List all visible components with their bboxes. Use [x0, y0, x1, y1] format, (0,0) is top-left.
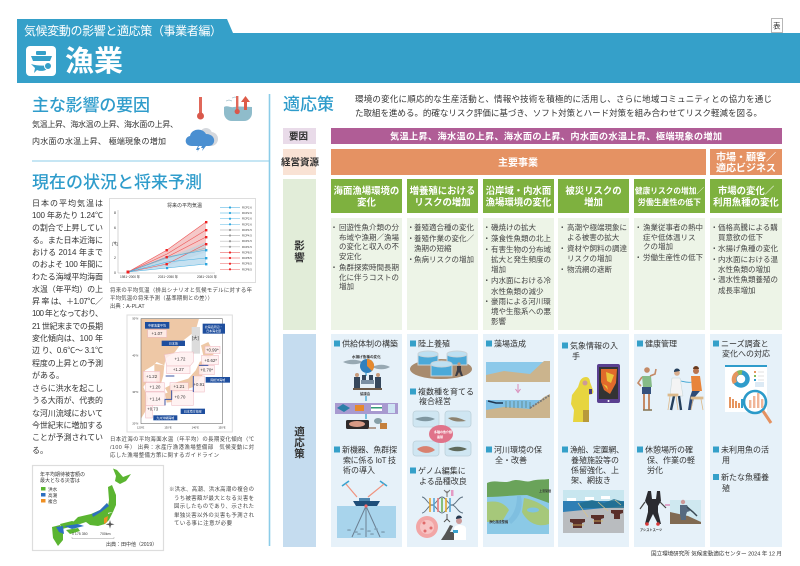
impacts panel 5: 漁業従事者の熱中 — [643, 222, 703, 232]
factors text — [32, 119, 178, 146]
impacts panel 4: よる被害の拡大 — [567, 232, 620, 242]
impacts panel 3: 豪雨による河川環 — [491, 296, 551, 306]
impacts panel 5 — [634, 218, 705, 330]
chart caption: 出典：A-PLAT — [110, 302, 145, 310]
illustration: ship sonar and satellites — [337, 481, 396, 538]
column 3 header: 漁場環境の変化 — [486, 196, 552, 208]
illustration: assist suit: アシストスーツ — [640, 527, 662, 532]
impacts panel 2 — [407, 218, 478, 330]
row label: adaptation measures — [283, 334, 316, 547]
adaptation panel 6: 用 — [722, 456, 730, 465]
body paragraph: のおよそ 100 年間に — [32, 259, 103, 269]
body paragraph: わたる海域平均海面 — [32, 272, 103, 282]
map: sea surface temperature trend around Japan: 中部漁業平均 — [148, 323, 166, 328]
adaptation panel 6 — [710, 334, 782, 547]
footer credit: 国立環境研究所 気候変動適応センター 2024 年 12 月 — [651, 550, 782, 558]
column 3 header: 沿岸域・内水面 — [486, 185, 551, 196]
impacts panel 5: 症や低体温リス — [643, 232, 696, 242]
map legend: 複合 — [48, 498, 58, 505]
map: sea surface temperature trend around Japan: 九州沖縄海域 — [156, 415, 174, 420]
row label: adaptation measures: 策 — [294, 447, 305, 460]
chart legend: RCP4.5 — [242, 239, 252, 243]
column 1 header: 変化 — [357, 196, 376, 208]
impacts panel 2: ・ — [407, 223, 414, 232]
map: sea surface temperature trend around Japan: +0.99* — [206, 348, 219, 353]
map: sea surface temperature trend around Japan: +1.27 — [173, 367, 184, 372]
impacts panel 1: ・ — [330, 223, 338, 232]
illustration: multi-species tanks: 養殖 — [437, 434, 443, 439]
adaptation panel 5 — [634, 334, 705, 547]
adaptation panel 3: 藻場造成 — [494, 338, 526, 348]
impacts panel 2: ・ — [407, 255, 414, 264]
map: sea surface temperature trend around Japan — [127, 315, 232, 432]
adaptation panel 5: 休憩場所の確 — [645, 444, 693, 454]
chart caption: 平均気温の将来予測（基準期間との差）） — [110, 294, 213, 302]
impacts panel 4: 物流網の遮断 — [567, 264, 612, 274]
adaptation panel 5: 健康管理 — [645, 338, 677, 348]
chart legend: RCP2.6 — [242, 206, 252, 210]
illustration: assist suit — [640, 491, 701, 532]
map: sea surface temperature trend around Japan: 50°N — [132, 317, 138, 321]
map: sea surface temperature trend around Japan: +1.72 — [175, 356, 186, 361]
section heading: adaptation: 適応策 — [283, 95, 334, 114]
map note — [169, 485, 255, 527]
impacts panel 3: ・ — [483, 276, 490, 285]
map: sea surface temperature trend around Japan: 北海道周辺・ — [205, 324, 223, 329]
impacts panel 6 — [710, 218, 782, 330]
map: sea surface temperature trend around Japan: 日本海北部 — [206, 328, 221, 333]
map note: ※洪水、高潮、洪水高潮の複合の — [169, 485, 254, 493]
line chart: future mean temperature: 将来の平均気温 — [167, 202, 202, 209]
column 3 header — [483, 179, 554, 213]
map note: ている事に注意が必要 — [174, 519, 233, 527]
map: largest annual disaster damage — [32, 466, 164, 550]
impacts panel 6: ・ — [710, 275, 718, 284]
row: management resources — [281, 149, 782, 175]
chart legend: RCP2.6 — [242, 211, 252, 215]
body paragraph: さらに洪水を起こし — [32, 383, 103, 393]
impacts panel 6: 買意欲の低下 — [718, 232, 763, 242]
row: management resources: 経営資源 — [281, 156, 319, 168]
adaptation panel 5: 保、作業の軽 — [647, 455, 695, 465]
adaptation panel 2: 複合経営 — [419, 396, 451, 406]
row label: impacts: 響 — [294, 251, 305, 264]
header banner — [17, 19, 800, 83]
body paragraph: 昇 率 は、＋1.07℃／ — [32, 297, 103, 306]
map caption: 応した漁場整備方策に関するガイドライン — [110, 451, 219, 459]
map: sea surface temperature trend around Japan: +1.22 — [146, 374, 158, 379]
row label: adaptation measures: 適 — [294, 425, 305, 438]
impacts panel 6: ・ — [710, 255, 718, 264]
row label: impacts — [283, 179, 316, 330]
map: sea surface temperature trend around Japan: [大] — [192, 334, 199, 341]
chart legend: RCP8.5 — [242, 267, 252, 271]
chart caption — [110, 286, 253, 310]
body paragraph: 日本の平均気温は — [32, 198, 103, 208]
impacts panel 3: 影響 — [491, 316, 506, 326]
adaptation panel 1: 新機器、魚群探 — [342, 444, 397, 454]
page tag: 表 — [773, 20, 781, 30]
impacts panel 1: 回遊性魚介類の分 — [339, 222, 399, 232]
impacts panel 1: 布域や漁期／漁場 — [339, 232, 399, 242]
body paragraph: な河川流域において — [32, 408, 103, 418]
map legend — [41, 486, 58, 505]
illustration: supply system — [335, 354, 398, 429]
impacts panel 3: ・ — [483, 297, 490, 306]
illustration: river environment — [487, 479, 551, 534]
map note: うち被害額が最大となる災害を — [174, 494, 254, 502]
line chart: future mean temperature: 2 — [114, 256, 116, 260]
adaptation panel 4: 係留強化、上 — [571, 465, 619, 475]
icon: storm cloud — [186, 128, 218, 152]
line chart: future mean temperature: 8 — [114, 211, 116, 215]
body paragraph: 100 年あたり 1.24℃ — [32, 210, 103, 220]
map legend: 高潮 — [48, 492, 58, 499]
line chart: future mean temperature: 2031~2050 年 — [158, 274, 179, 279]
adaptation panel 2: ゲノム編集に — [418, 466, 466, 476]
map: sea surface temperature trend around Japan: +0.91 — [194, 382, 205, 387]
chart legend: RCP4.5 — [242, 245, 252, 249]
impacts panel 3: 水性魚類の減少 — [491, 286, 544, 296]
column 4 header: 増加 — [584, 196, 603, 208]
impacts panel 1: 魚群探索時間長期 — [339, 262, 399, 272]
body paragraph: 程度の上昇との予測 — [32, 358, 103, 368]
map: sea surface temperature trend around Japan: +0.70 — [175, 394, 186, 399]
adaptation panel 6: 未利用魚の活 — [721, 444, 769, 454]
adaptation panel 2: よる品種改良 — [419, 476, 467, 486]
adaptation intro: た取組を進める。的確なリスク評価に基づき、ソフト対策とハード対策を組み合わせてリスク軽減を図る。 — [355, 108, 762, 118]
impacts panel 5: ・ — [634, 223, 642, 232]
adaptation panel 4: 漁船、定置網、 — [570, 444, 624, 454]
body paragraph: 100 年となっており、 — [32, 308, 103, 318]
chart legend: RCP2.6 — [242, 222, 252, 226]
map: sea surface temperature trend around Japan: +1.07 — [152, 331, 163, 336]
adaptation panel 1: 供給体制の構築 — [342, 338, 398, 348]
adaptation intro: 環境の変化に順応的な生産活動と、情報や技術を積極的に活用し、さらに地域コミュニティとの協力を通じ — [355, 94, 772, 104]
line chart: future mean temperature: 4 — [114, 241, 116, 245]
illustration: genome editing — [416, 490, 466, 540]
column 1 header — [331, 179, 402, 213]
impacts panel 2: 養殖作業の変化／ — [414, 233, 474, 243]
illustration: seaweed bed creation — [486, 361, 550, 418]
section heading: main factors: 主な影響の要因 — [32, 96, 150, 115]
map: largest annual disaster damage: 0 175 350 — [72, 532, 88, 536]
line chart: future mean temperature — [110, 198, 256, 282]
adaptation panel 2: 複数種を育てる — [418, 386, 474, 396]
impacts panel 6: 価格高騰による購 — [718, 222, 778, 232]
column 6 header — [710, 179, 782, 213]
impacts panel 3: 増加 — [491, 264, 506, 274]
column 6 header: 利用魚種の変化 — [713, 196, 779, 208]
body paragraph: うる大雨が、代表的 — [32, 395, 103, 405]
chart legend: RCP4.5 — [242, 234, 252, 238]
adaptation intro — [355, 94, 772, 118]
column 2 header — [407, 179, 478, 213]
impacts panel 4: ・ — [558, 265, 566, 274]
column 4 header — [558, 179, 629, 213]
impacts panel 3: 有害生物の分布域 — [491, 244, 551, 254]
impacts panel 6: 水性魚類の増加 — [718, 264, 770, 274]
map: largest annual disaster damage: 出典：田中他（2019） — [106, 541, 157, 548]
line chart: future mean temperature: 2081~2100 年 — [197, 274, 218, 279]
row: management resources: 市場・顧客／ — [716, 150, 776, 164]
column 5 header: 健康リスクの増加／ — [635, 186, 704, 196]
impacts panel 1: 安定化 — [339, 252, 362, 261]
column 2 header: リスクの増加 — [414, 196, 471, 208]
impacts panel 2: ・ — [407, 234, 414, 243]
illustration: multi-species tanks: 多種の魚介類 — [434, 429, 452, 434]
map: sea surface temperature trend around Japan: 150°E — [218, 426, 226, 430]
impacts panel 1: ・ — [330, 263, 338, 272]
map: sea surface temperature trend around Japan: +0.70* — [200, 368, 213, 373]
impacts panel 3: 拡大と発生頻度の — [491, 254, 551, 264]
impacts panel 6: 成長率増加 — [718, 285, 756, 295]
illustration: supply system: 協議会 — [360, 391, 371, 396]
body paragraph: 今世紀末に増加する — [32, 420, 103, 430]
map legend: 洪水 — [48, 486, 58, 493]
map caption: /100 年） 出典：水産庁漁港漁場整備部 気候変動に対 — [110, 443, 255, 451]
map: sea surface temperature trend around Japan: 日本南方海域 — [184, 409, 202, 414]
map: sea surface temperature trend around Japan: +0.62* — [204, 358, 217, 363]
body paragraph: 変化傾向は、100 年 — [32, 333, 103, 343]
row: factors — [283, 128, 782, 144]
map caption: 日本近海の平均海面水温（年平均）の長期変化傾向（℃ — [110, 435, 255, 443]
section heading: present and future: 現在の状況と将来予測 — [32, 173, 202, 192]
map note: 図示したものであり、示された — [174, 503, 254, 510]
map caption — [110, 435, 255, 459]
chart caption: 将来の平均気温（排出シナリオと気候モデルに対する年 — [110, 286, 253, 294]
adaptation panel 4 — [558, 334, 629, 547]
map: sea surface temperature trend around Japan: +1.20 — [150, 384, 161, 389]
adaptation panel 6: 新たな魚種養 — [721, 472, 769, 482]
adaptation panel 1: 術の導入 — [343, 465, 375, 475]
impacts panel 6: 水揚げ魚種の変化 — [718, 243, 778, 253]
body paragraph: 水温（年平均）の上 — [32, 284, 103, 294]
chart legend — [220, 206, 252, 271]
factors text: 気温上昇、海水温の上昇、海水面の上昇、 — [32, 119, 178, 129]
impacts panel 6: 温水性魚類養殖の — [718, 274, 778, 284]
impacts panel 4 — [558, 218, 629, 330]
impacts panel 6: ・ — [710, 244, 718, 253]
impacts panel 3: 藻食性魚類の北上 — [491, 233, 551, 243]
illustration: multi-species tanks — [413, 411, 471, 456]
impacts panel 1: 化に伴うコストの — [339, 272, 399, 282]
column 4 header: 被災リスクの — [565, 185, 622, 196]
row label: impacts: 影 — [294, 239, 305, 252]
impacts panel 5: ・ — [634, 253, 642, 262]
icon: sea level rise — [224, 96, 252, 121]
map: sea surface temperature trend around Japan: 40°N — [132, 353, 138, 357]
chart legend: RCP8.5 — [242, 256, 252, 260]
map: sea surface temperature trend around Japan: 120°E — [137, 426, 144, 430]
impacts panel 4: リスクの増加 — [567, 253, 612, 263]
line chart: future mean temperature: 1981~2000 年 — [120, 274, 141, 279]
page tag — [772, 18, 782, 32]
impacts panel 6: ・ — [710, 223, 718, 232]
chart legend: RCP4.5 — [242, 228, 252, 232]
adaptation panel 3: 河川環境の保 — [494, 444, 542, 454]
adaptation panel 4: 養殖施設等の — [571, 455, 619, 465]
body paragraph: る。 — [32, 446, 48, 455]
row label: adaptation measures: 応 — [294, 437, 305, 449]
impacts panel 5: 労働生産性の低下 — [643, 252, 703, 262]
adaptation panel 2 — [407, 334, 478, 547]
map: sea surface temperature trend around Japan: 20°N — [132, 422, 138, 426]
row: management resources: 適応ビジネス — [716, 162, 776, 174]
impacts panel 3 — [483, 218, 554, 330]
adaptation panel 6: ニーズ調査と — [721, 338, 769, 348]
chart legend: RCP8.5 — [242, 262, 252, 266]
map: sea surface temperature trend around Japan: 日本海 — [169, 341, 178, 346]
column 6 header: 市場の変化／ — [718, 185, 775, 196]
impacts panel 4: 高潮や極端現象に — [567, 222, 627, 232]
column 1 header: 海面漁場環境の — [334, 185, 399, 196]
body paragraph: おける 2014 年まで — [32, 247, 103, 257]
illustration: river environment: 上流管理 — [539, 488, 551, 493]
impacts panel 4: ・ — [558, 244, 566, 253]
column 5 header: 労働生産性の低下 — [638, 197, 701, 207]
adaptation panel 4: 気象情報の入 — [570, 340, 618, 350]
illustration: land-based tanks — [410, 351, 472, 379]
illustration: river environment: 浄化施設整備 — [489, 519, 509, 524]
column 5 header — [634, 179, 705, 213]
icon: fishing boat and fish — [26, 46, 56, 76]
impacts panel 1: の変化と収入の不 — [339, 241, 399, 251]
row: factors: 要因 — [289, 132, 308, 142]
illustration: person with weather tablet — [571, 364, 620, 422]
adaptation panel 6: 変化への対応 — [722, 348, 770, 358]
column 2 header: 増養殖における — [410, 185, 475, 196]
sector title: 漁業 — [65, 45, 123, 78]
line chart: future mean temperature: 0 — [114, 271, 116, 275]
impacts panel 1 — [330, 218, 402, 330]
chart legend: RCP8.5 — [242, 250, 252, 254]
impacts panel 3: ・ — [483, 234, 490, 243]
impacts panel 2: 魚病リスクの増加 — [414, 254, 474, 264]
map: sea surface temperature trend around Japan: +0.73 — [147, 406, 159, 411]
map note: 単独災害以外の災害も予測され — [174, 511, 255, 519]
icon: thermometer — [197, 97, 204, 120]
map: sea surface temperature trend around Japan: +1.21 — [174, 384, 185, 389]
impacts panel 5: クの増加 — [643, 241, 673, 251]
map: largest annual disaster damage: 最大となる災害は — [40, 477, 80, 484]
adaptation panel 3: 全・改善 — [495, 455, 527, 465]
factors text: 内水面の水温上昇、 極端現象の増加 — [32, 136, 166, 146]
adaptation panel 2: 陸上養殖 — [418, 338, 450, 348]
map: sea surface temperature trend around Japan: 房総沖海域 — [210, 377, 225, 382]
adaptation panel 6: 殖 — [722, 483, 730, 493]
impacts panel 2: 漁期の短縮 — [414, 243, 452, 253]
impacts panel 3: ・ — [483, 245, 490, 254]
adaptation panel 4: 架、網抜き — [571, 475, 611, 485]
adaptation panel 5: 労化 — [647, 465, 663, 475]
illustration: survey report with magnifier — [725, 365, 771, 423]
illustration: mooring reinforcement — [563, 490, 624, 533]
adaptation panel 1 — [331, 334, 402, 547]
body paragraph: がある。 — [32, 370, 64, 380]
impacts panel 3: 内水面における冷 — [491, 275, 551, 285]
body paragraph — [32, 198, 103, 455]
body paragraph: の割合で上昇してい — [32, 222, 103, 232]
map: largest annual disaster damage: 年平均期待被害額の — [40, 471, 85, 478]
line chart: future mean temperature: 6 — [114, 226, 116, 230]
illustration: supply system: 水揚げ魚種の変化 — [352, 354, 381, 359]
impacts panel 6: 内水面における温 — [718, 254, 778, 264]
map: sea surface temperature trend around Japan: 130°E — [164, 426, 172, 430]
adaptation panel 1: 索に係る IoT 技 — [343, 455, 396, 465]
impacts panel 3: 境や生態系への悪 — [491, 306, 551, 316]
body paragraph: 21 世紀末までの長期 — [32, 321, 103, 331]
map: largest annual disaster damage: 700km — [100, 532, 111, 536]
impacts panel 1: 増加 — [339, 281, 354, 291]
adaptation panel 3 — [483, 334, 554, 547]
body paragraph: ことが予測されてい — [32, 432, 103, 442]
impacts panel 4: ・ — [558, 223, 566, 232]
impacts panel 3: ・ — [483, 223, 490, 232]
body paragraph: 辺 り、0.6℃～ 3.1℃ — [32, 346, 103, 355]
map: sea surface temperature trend around Japan: 30°N — [132, 390, 138, 394]
header subtitle: 気候変動の影響と適応策（事業者編） — [24, 23, 222, 38]
body paragraph: る。また日本近海に — [32, 235, 103, 245]
row: management resources: 主要事業 — [498, 156, 538, 169]
chart legend: RCP2.6 — [242, 217, 252, 221]
impacts panel 2: 養殖適合種の変化 — [414, 222, 474, 232]
impacts panel 3: 磯焼けの拡大 — [491, 222, 536, 232]
line chart: future mean temperature: [℃] — [112, 241, 118, 246]
map: sea surface temperature trend around Japan: 140°E — [192, 426, 199, 430]
row: factors: 気温上昇、海水温の上昇、海水面の上昇、内水面の水温上昇、極端現象の増加 — [390, 130, 722, 142]
impacts panel 4: 資材や飼料の調達 — [567, 243, 627, 253]
illustration: hydration and medical check — [638, 366, 703, 410]
adaptation panel 4: 手 — [572, 351, 580, 361]
map: sea surface temperature trend around Japan: +1.14 — [150, 396, 161, 401]
